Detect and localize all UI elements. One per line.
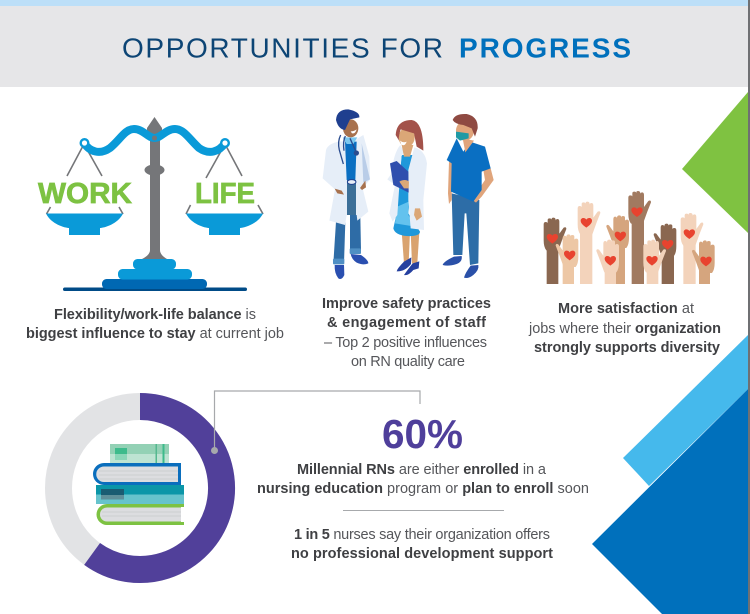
female doctor with folder	[387, 120, 427, 275]
green book	[96, 504, 184, 525]
text: safety practices: & engagement of staff	[327, 315, 486, 331]
scale base	[63, 259, 247, 291]
icon: three healthcare workers	[323, 109, 494, 279]
label: life: LIFE	[195, 178, 255, 210]
header band	[0, 6, 750, 87]
teal book	[96, 485, 184, 504]
text: millennial RNs: Millennial RNs are either enrolled in a	[297, 462, 547, 478]
icon: balance scale work life	[38, 117, 263, 291]
text: work-life balance: biggest influence to stay at current job	[26, 326, 284, 342]
scale knob	[144, 164, 164, 176]
left pan	[46, 214, 123, 235]
green triangle	[682, 92, 748, 233]
male nurse in scrubs with mask	[443, 114, 494, 278]
text: work-life balance: Flexibility/work-life balance is	[54, 307, 256, 323]
scale beam	[84, 129, 225, 152]
beam eyes	[81, 139, 229, 147]
title	[122, 32, 631, 64]
text: safety practices: – Top 2 positive influences	[324, 335, 487, 351]
text: safety practices	[322, 296, 491, 370]
scale pillar	[142, 117, 167, 259]
light blue band	[623, 335, 748, 486]
donut chart 60 percent	[58, 406, 222, 570]
text: diversity: strongly supports diversity	[534, 340, 720, 356]
label: work: WORK	[38, 178, 132, 210]
text: millennial RNs	[257, 462, 589, 497]
title: OPPORTUNITIES FOR	[122, 32, 443, 64]
text: work-life balance	[26, 307, 284, 342]
text: 1 in 5 nurses	[291, 527, 553, 562]
text: 1 in 5 nurses: no professional development support	[291, 546, 553, 562]
top light green book	[110, 444, 169, 463]
text: diversity: More satisfaction at	[558, 301, 694, 317]
text: 1 in 5 nurses: 1 in 5 nurses say their organization offers	[294, 527, 550, 543]
text: diversity: jobs where their organization	[528, 321, 721, 337]
icon: raised hands with hearts	[544, 191, 715, 284]
dark blue triangle	[592, 389, 748, 614]
doctor with stethoscope	[323, 109, 370, 279]
icon: stack of books	[93, 444, 184, 525]
blue book	[93, 463, 181, 485]
top light blue strip	[0, 0, 750, 6]
beam pivot	[152, 136, 157, 140]
text: safety practices: on RN quality care	[351, 354, 465, 370]
text: diversity	[528, 301, 721, 356]
text: safety practices: Improve safety practices	[322, 296, 491, 312]
right pan	[186, 214, 263, 235]
right edge line	[748, 0, 750, 614]
big number 60%: 60%	[382, 411, 463, 457]
scale strings	[46, 144, 263, 214]
callout connector	[211, 391, 420, 454]
text: millennial RNs: nursing education program or plan to enroll soon	[257, 481, 589, 497]
title: PROGRESS	[459, 32, 631, 64]
